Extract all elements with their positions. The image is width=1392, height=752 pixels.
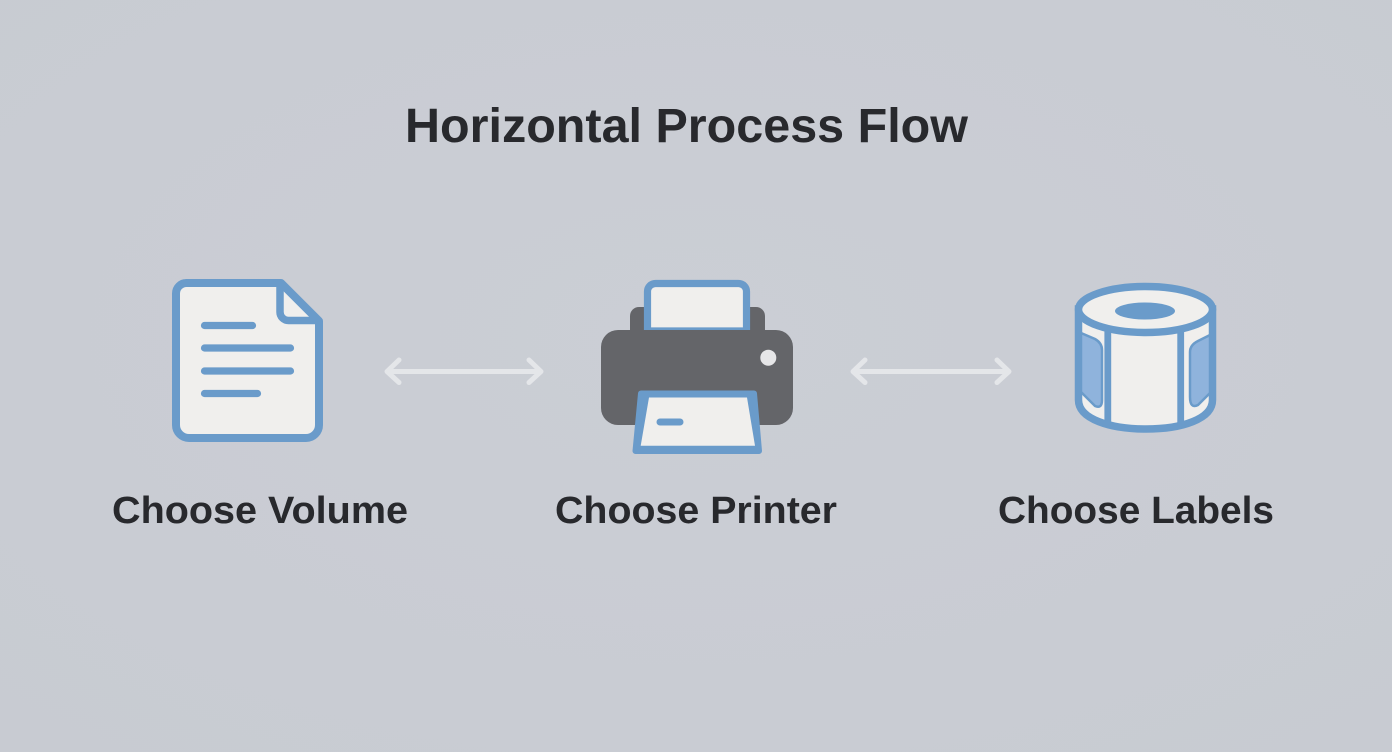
title: Horizontal Process Flow [405,100,969,153]
label: choose printer: Choose Printer [555,490,837,532]
label: choose volume: Choose Volume [112,490,408,532]
arrow: volume to printer [387,360,541,382]
arrow: printer to labels [853,360,1009,382]
icon: document [176,283,319,438]
icon: printer [601,284,793,451]
label: choose labels: Choose Labels [998,490,1274,532]
icon: label roll [1078,286,1212,429]
